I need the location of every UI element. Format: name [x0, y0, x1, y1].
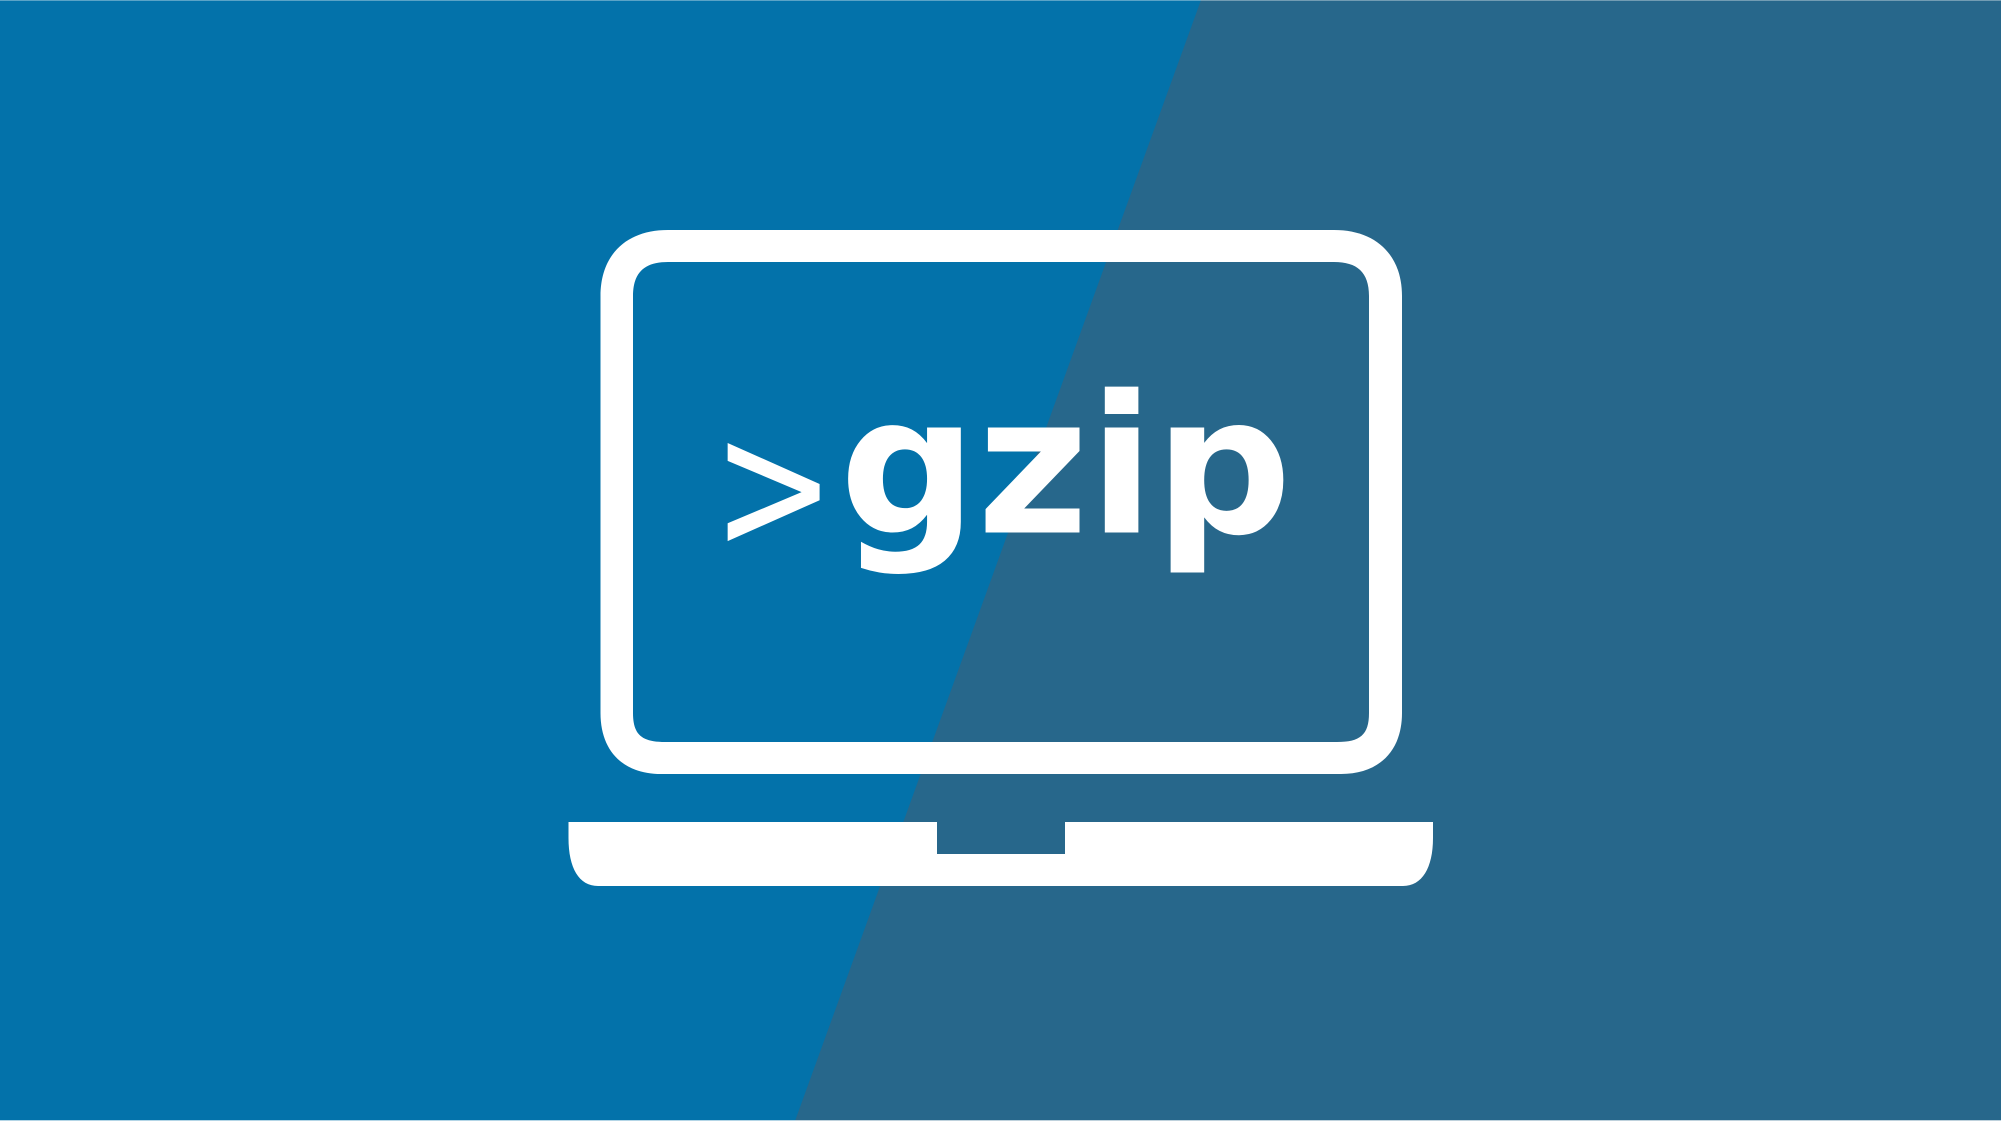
- laptop base with notch: [568, 822, 1433, 886]
- background: right slate diagonal panel: [795, 0, 2001, 1121]
- word: gzip: gzip: [840, 356, 1292, 578]
- bottom edge highlight: [0, 1120, 2001, 1121]
- icon: laptop: [568, 230, 1433, 886]
- laptop screen frame: [600, 230, 1402, 774]
- prompt symbol: >: [720, 369, 827, 603]
- command prompt text: [720, 356, 1292, 603]
- top edge highlight: [0, 0, 2001, 1]
